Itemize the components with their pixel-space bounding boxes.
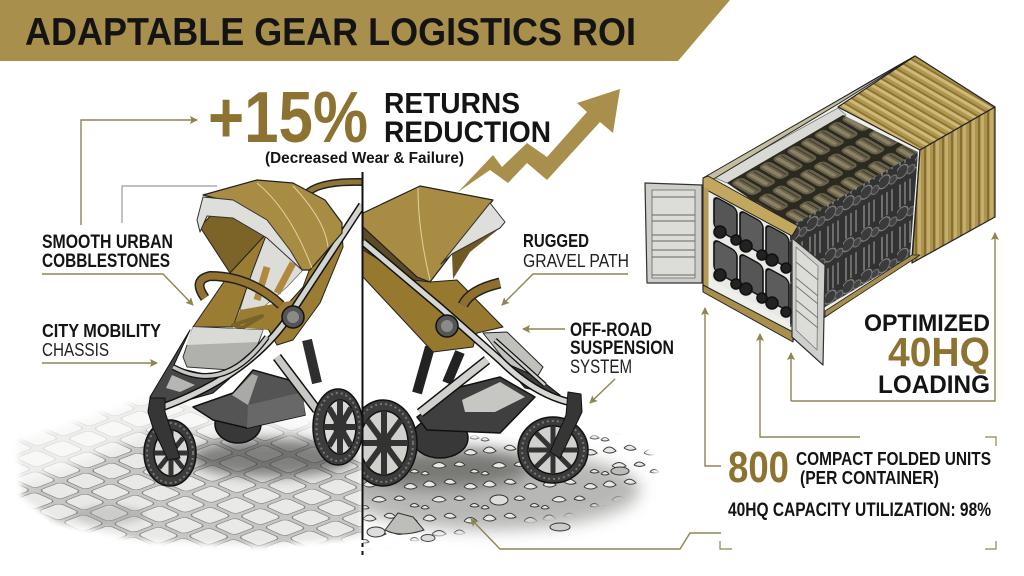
arrow: container bracket	[791, 233, 995, 401]
harness straps	[257, 263, 293, 300]
callout: smooth urban cobblestones: SMOOTH URBAN	[42, 232, 173, 253]
seat back	[240, 233, 303, 310]
callout: rugged gravel path: RUGGED	[523, 231, 589, 251]
front wheel	[144, 420, 196, 486]
arm bar	[463, 283, 500, 305]
arrow: to container floor	[760, 334, 860, 437]
panel: capacity stats: COMPACT FOLDED UNITS	[796, 449, 991, 469]
roof panel	[838, 56, 995, 150]
illustration: off-road stroller	[349, 186, 588, 486]
callout: optimized 40HQ loading: 40HQ	[888, 329, 990, 375]
seat	[363, 250, 503, 352]
basket	[417, 377, 535, 433]
footwell	[150, 330, 232, 402]
callout: optimized 40HQ loading	[864, 310, 990, 399]
rear middle wheel	[214, 421, 262, 444]
panel: capacity stats	[720, 437, 996, 549]
left door	[645, 183, 702, 283]
middle wheel	[416, 422, 469, 459]
frame tube	[163, 205, 362, 407]
seat fill behind canopy	[364, 228, 427, 282]
front post and bottom sill	[704, 188, 708, 290]
front opening	[712, 193, 790, 323]
frame	[363, 242, 573, 403]
canopy inner	[202, 216, 264, 273]
callout: city mobility chassis: CITY MOBILITY	[42, 320, 162, 341]
arrow: rising zigzag growth	[458, 89, 620, 192]
arrow: to container corner	[705, 308, 721, 466]
callout: optimized 40HQ loading: LOADING	[878, 371, 990, 399]
side bottom sill	[825, 255, 920, 317]
canopy	[363, 186, 493, 282]
hub	[282, 306, 304, 328]
divider: split line	[362, 172, 364, 558]
front wheel	[518, 417, 588, 483]
illustration: 40HQ shipping container	[645, 56, 995, 365]
basket	[193, 370, 305, 428]
scene: cobblestone ground	[16, 402, 362, 550]
canopy visor	[441, 203, 505, 264]
stat: +15% returns reduction	[208, 78, 551, 167]
title: ADAPTABLE GEAR LOGISTICS ROI	[25, 11, 636, 54]
callout: off-road suspension system	[523, 320, 674, 403]
stat: +15% returns reduction: RETURNS	[384, 88, 520, 120]
right door	[792, 238, 825, 365]
stacked units side	[790, 152, 918, 327]
interior	[703, 56, 920, 340]
callout: city mobility chassis	[42, 320, 162, 363]
stat: +15% returns reduction: (Decreased Wear & Failure)	[265, 150, 464, 167]
callout: off-road suspension system: SYSTEM	[570, 357, 632, 378]
callout: rugged gravel path: GRAVEL PATH	[523, 250, 629, 271]
arrow: to gravel	[471, 519, 721, 549]
callout: off-road suspension system: SUSPENSION	[570, 338, 674, 359]
roof rail	[703, 56, 915, 180]
stat: +15% returns reduction: REDUCTION	[384, 116, 551, 149]
stacked units front	[714, 196, 791, 317]
illustration: city stroller	[144, 180, 363, 486]
canopy inner	[452, 228, 500, 279]
side panel	[912, 107, 995, 263]
handlebar	[305, 182, 362, 196]
rear wheel	[364, 399, 418, 487]
front top beam	[703, 176, 798, 236]
strut	[420, 360, 487, 413]
arm bar	[200, 276, 281, 305]
callout: optimized 40HQ loading: OPTIMIZED	[864, 310, 990, 337]
panel: capacity stats: (PER CONTAINER)	[800, 468, 939, 488]
callout: city mobility chassis: CHASSIS	[42, 339, 109, 360]
callout: smooth urban cobblestones	[42, 186, 217, 305]
suspension	[417, 347, 460, 393]
callout: off-road suspension system: OFF-ROAD	[570, 320, 652, 341]
rear leg and suspension	[277, 357, 317, 410]
arrow: to door	[790, 353, 792, 401]
rear wheel	[313, 389, 363, 465]
front fork	[550, 392, 582, 458]
scene: gravel ground	[340, 430, 663, 550]
canopy visor	[197, 197, 302, 270]
hub	[436, 315, 458, 337]
callout: smooth urban cobblestones: COBBLESTONES	[42, 251, 170, 272]
stacked units top	[727, 115, 918, 227]
seat cushion	[183, 327, 263, 370]
title banner	[0, 0, 730, 61]
canopy	[203, 180, 342, 270]
panel: capacity stats: 800	[728, 443, 789, 492]
stat: +15% returns reduction: +15%	[208, 78, 368, 158]
front fork	[148, 398, 180, 460]
arrow: connector to +15% stat	[81, 120, 197, 225]
callout: rugged gravel path	[502, 231, 629, 305]
